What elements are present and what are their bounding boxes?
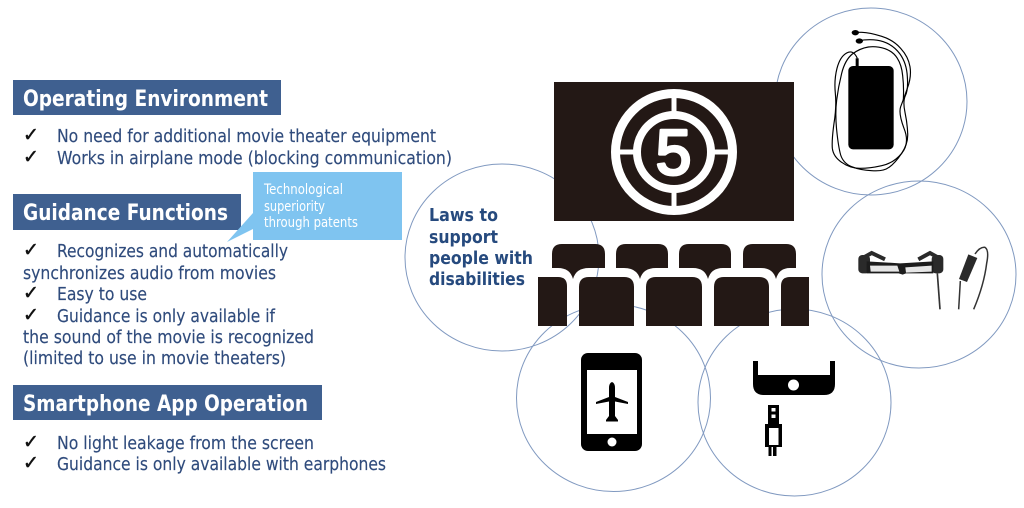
list: operating environment items: ✓ (23, 146, 39, 168)
panel: operating environment (13, 80, 452, 169)
list: guidance functions items: Recognizes and automatically (57, 241, 288, 262)
list: guidance functions items (23, 239, 314, 369)
icon: cinema screen with countdown (554, 82, 794, 221)
list: smartphone app items: ✓ (23, 431, 39, 453)
icon: smart glasses with cable and controller (858, 247, 988, 309)
list: smartphone app items (23, 431, 386, 475)
icon: phone bottom and lightning connector (753, 361, 835, 456)
callout: technological superiority: superiority (264, 199, 325, 215)
list: smartphone app items: Guidance is only available with earphones (57, 454, 386, 475)
list: guidance functions items: synchronizes audio from movies (23, 263, 276, 284)
list: smartphone app items: No light leakage from the screen (57, 433, 314, 454)
circle outlines group (405, 8, 1016, 496)
icon: theater seats (538, 244, 809, 326)
list: operating environment items (23, 124, 452, 169)
list: guidance functions items: Easy to use (57, 284, 147, 305)
panel: smartphone app operation (13, 385, 386, 475)
icon: phone with airplane mode (581, 353, 642, 451)
list: guidance functions items: ✓ (23, 304, 39, 326)
list: operating environment items: No need for additional movie theater equipment (57, 126, 436, 147)
label: laws to support people with disabilities: disabilities (429, 270, 525, 290)
list: guidance functions items: ✓ (23, 282, 39, 304)
heading: Smartphone App Operation: Smartphone App Operation (23, 392, 308, 417)
list: smartphone app items: ✓ (23, 452, 39, 474)
label: laws to support people with disabilities: Laws to (429, 206, 498, 226)
callout: technological superiority (227, 172, 402, 242)
list: operating environment items: ✓ (23, 124, 39, 146)
icon: smartphone with earphones (832, 30, 910, 171)
heading: Operating Environment: Operating Environment (23, 87, 268, 112)
label: laws to support people with disabilities: people with (429, 249, 533, 269)
list: guidance functions items: (limited to use in movie theaters) (23, 348, 286, 369)
heading: Guidance Functions (13, 194, 241, 230)
callout: technological superiority: Technological (263, 182, 343, 198)
label: laws to support people with disabilities (429, 206, 533, 290)
callout: technological superiority: through patents (264, 215, 358, 231)
heading: Guidance Functions: Guidance Functions (23, 201, 228, 226)
list: guidance functions items: the sound of the movie is recognized (23, 327, 314, 348)
list: guidance functions items: Guidance is only available if (57, 306, 276, 327)
list: operating environment items: Works in airplane mode (blocking communication) (57, 148, 452, 169)
heading: Operating Environment (13, 80, 281, 115)
panel: guidance functions (13, 194, 314, 369)
label: laws to support people with disabilities: support (429, 228, 498, 248)
heading: Smartphone App Operation (13, 385, 322, 420)
list: guidance functions items: ✓ (23, 239, 39, 261)
icon: cinema screen with countdown: 5 (656, 116, 691, 188)
